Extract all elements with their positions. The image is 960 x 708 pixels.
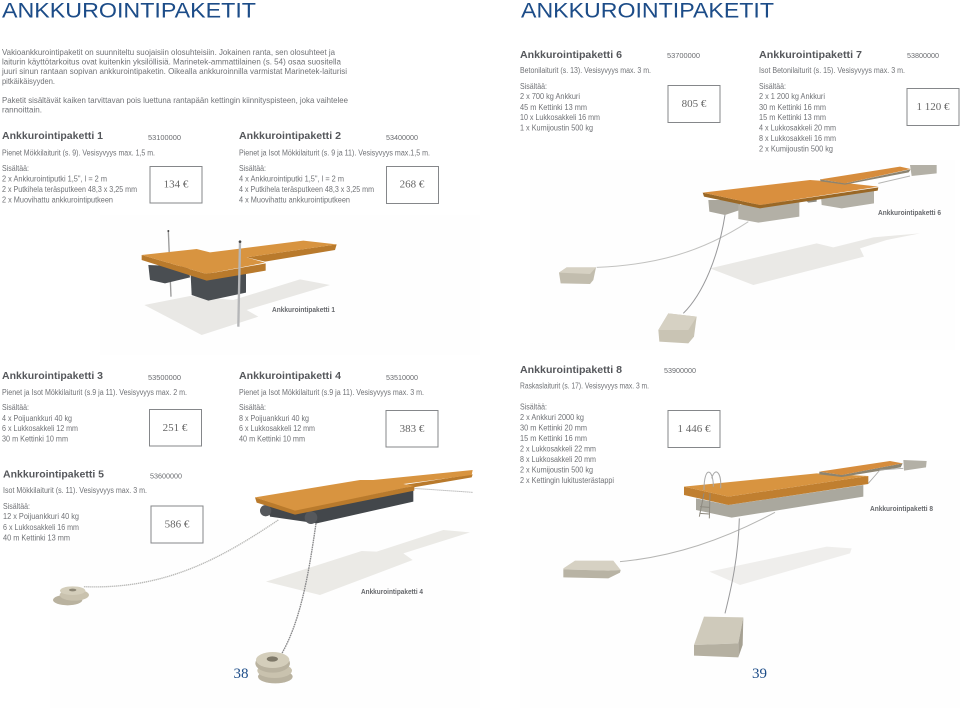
caption: package 1: Ankkurointipaketti 1: [272, 305, 335, 314]
panel: package 7: 4 x Lukkosakkeli 20 mm: [759, 124, 836, 132]
panel: package 6: Ankkurointipaketti 6: [520, 49, 622, 61]
illustration: dock package 8: [563, 460, 927, 657]
panel: package 5: 6 x Lukkosakkeli 16 mm: [3, 523, 79, 532]
panel: package 8: 2 x Kettingin lukitusterästappi: [520, 476, 614, 485]
panel: package 1: Ankkurointipaketti 1: [2, 130, 103, 142]
panel: package 3: Pienet ja Isot Mökkilaiturit (s.9 ja 11). Vesisyvyys max. 2 m.: [2, 388, 187, 397]
intro text: laiturin käyttötarkoitus ovat kuitenkin yksilöllisiä. Marinetek-ammattilainen (s. 54) osaa suositella: [2, 56, 341, 66]
panel: package 5: 40 m Kettinki 13 mm: [3, 534, 70, 542]
panel: package 1: [2, 130, 202, 204]
panel: package 1: Pienet Mökkilaiturit (s. 9). Vesisyvyys max. 1,5 m.: [2, 148, 155, 158]
illustration: dock package 4 shadow, chains and weights: [53, 520, 470, 683]
panel: package 8: 2 x Lukkosakkeli 22 mm: [520, 444, 596, 454]
price box: 805 €: [682, 98, 707, 110]
caption: package 8: Ankkurointipaketti 8: [870, 504, 933, 513]
price box: [150, 410, 202, 446]
panel: package 6: 2 x 700 kg Ankkuri: [520, 92, 580, 101]
panel: package 4: [239, 370, 438, 447]
price box: 134 €: [164, 178, 189, 190]
panel: package 6: Betonilaiturit (s. 13). Vesisyvyys max. 3 m.: [520, 66, 651, 75]
price box: [386, 166, 438, 204]
panel: package 3: 53500000: [148, 373, 181, 382]
panel: package 6: Sisältää:: [520, 82, 547, 91]
panel: package 7: 2 x Kumijoustin 500 kg: [759, 144, 833, 154]
caption: package 6: Ankkurointipaketti 6: [878, 208, 941, 217]
price box: 1 446 €: [678, 423, 711, 435]
page number 39: 39: [752, 666, 767, 682]
panel: package 5: Ankkurointipaketti 5: [3, 468, 104, 480]
panel: package 8: Raskaslaiturit (s. 17). Vesisyvyys max. 3 m.: [520, 382, 649, 390]
panel: package 4: Sisältää:: [239, 403, 266, 412]
panel: package 7: 2 x 1 200 kg Ankkuri: [759, 92, 825, 101]
panel: package 4: 53510000: [386, 373, 418, 382]
panel: package 1: Sisältää:: [2, 164, 29, 173]
panel: package 8: 15 m Kettinki 16 mm: [520, 434, 587, 443]
panel: package 7: [759, 49, 959, 154]
panel: package 3: 30 m Kettinki 10 mm: [2, 434, 68, 444]
panel: package 6: 53700000: [667, 51, 700, 60]
panel: package 8: 2 x Kumijoustin 500 kg: [520, 466, 593, 474]
panel: package 3: 6 x Lukkosakkeli 12 mm: [2, 424, 78, 433]
panel: package 4: 40 m Kettinki 10 mm: [239, 434, 305, 444]
page number 38: 38: [234, 666, 248, 682]
panel: package 8: Sisältää:: [520, 402, 547, 412]
intro text: rannoittain.: [2, 104, 42, 114]
illustration: dock package 4 deck: [255, 470, 473, 524]
price box: [668, 410, 720, 448]
panel: package 4: Pienet ja Isot Mökkilaiturit (s.9 ja 11). Vesisyvyys max. 3 m.: [239, 388, 424, 397]
panel: package 3: Ankkurointipaketti 3: [2, 370, 103, 382]
panel: package 7: 30 m Kettinki 16 mm: [759, 103, 826, 112]
panel: package 5: [3, 468, 203, 543]
panel: package 5: 12 x Poijuankkuri 40 kg: [3, 512, 79, 521]
panel: package 2: 4 x Putkihela teräsputkeen 48,3 x 3,25 mm: [239, 185, 374, 194]
price box: [151, 506, 203, 543]
panel: package 2: [239, 130, 438, 204]
panel: package 2: Pienet ja Isot Mökkilaiturit (s. 9 ja 11). Vesisyvyys max.1,5 m.: [239, 148, 430, 158]
panel: package 3: Sisältää:: [2, 403, 29, 412]
panel: package 6: 1 x Kumijoustin 500 kg: [520, 124, 593, 132]
panel: package 7: 53800000: [907, 51, 939, 60]
panel: package 7: Ankkurointipaketti 7: [759, 49, 862, 61]
panel: package 8: 8 x Lukkosakkeli 20 mm: [520, 455, 596, 464]
price box: 268 €: [400, 178, 425, 190]
panel: package 6: 10 x Lukkosakkeli 16 mm: [520, 113, 600, 122]
panel: package 8: 30 m Kettinki 20 mm: [520, 424, 587, 432]
panel: package 2: 4 x Ankkurointiputki 1,5", l = 2 m: [239, 174, 344, 184]
panel: package 3: 4 x Poijuankkuri 40 kg: [2, 414, 72, 423]
panel: package 2: Ankkurointipaketti 2: [239, 130, 341, 142]
price box: 1 120 €: [916, 101, 950, 113]
intro text: juuri sinun rantaan sopivan ankkurointipaketin. Oikealla ankkuroinnilla varmistat Marinetek-laiturisi: [1, 66, 347, 76]
panel: package 4: 6 x Lukkosakkeli 12 mm: [239, 424, 315, 433]
panel: package 7: Sisältää:: [759, 82, 786, 91]
intro text: Paketit sisältävät kaiken tarvittavan pois luettuna rantapään kettingin kiinnityspisteen, joka vaihtelee: [2, 95, 348, 105]
panel: package 7: Isot Betonilaiturit (s. 15). Vesisyvyys max. 3 m.: [759, 66, 905, 75]
price box: [386, 410, 438, 447]
intro text: Vakioankkurointipaketit on suunniteltu suojaisiin olosuhteisiin. Jokainen ranta, sen olosuhteet ja: [2, 47, 335, 57]
panel: package 6: 45 m Kettinki 13 mm: [520, 103, 587, 112]
intro text: [1, 47, 348, 114]
illustration: dock package 1: [142, 230, 337, 335]
price box: [907, 88, 959, 126]
panel: package 1: 53100000: [148, 133, 181, 142]
panel: package 6: [520, 49, 720, 132]
panel: package 4: Ankkurointipaketti 4: [239, 370, 341, 382]
panel: package 8: 53900000: [664, 366, 696, 375]
price box: 586 €: [165, 518, 190, 530]
panel: package 7: 15 m Kettinki 13 mm: [759, 113, 826, 122]
panel: package 8: [520, 364, 720, 485]
panel: package 1: 2 x Putkihela teräsputkeen 48,3 x 3,25 mm: [2, 185, 137, 194]
panel: package 7: 8 x Lukkosakkeli 16 mm: [759, 134, 836, 143]
title: right page: ANKKUROINTIPAKETIT: [521, 0, 774, 22]
panel: package 2: 4 x Muovihattu ankkurointiputkeen: [239, 196, 350, 204]
price box: [668, 86, 720, 122]
panel: package 1: 2 x Muovihattu ankkurointiputkeen: [2, 196, 113, 204]
panel: package 8: 2 x Ankkuri 2000 kg: [520, 413, 584, 422]
panel: package 1: 2 x Ankkurointiputki 1,5", l = 2 m: [2, 174, 107, 184]
price box: 383 €: [400, 423, 425, 435]
panel: package 5: Sisältää:: [3, 502, 30, 511]
price box: 251 €: [163, 422, 188, 434]
panel: package 2: Sisältää:: [239, 164, 266, 173]
panel: package 4: 8 x Poijuankkuri 40 kg: [239, 414, 309, 423]
panel: package 2: 53400000: [386, 133, 418, 142]
illustration: dock package 6: [559, 165, 937, 343]
panel: package 8: Ankkurointipaketti 8: [520, 364, 622, 376]
price box: [150, 166, 202, 203]
panel: package 3: [2, 370, 202, 446]
panel: package 5: Isot Mökkilaiturit (s. 11). Vesisyvyys max. 3 m.: [3, 486, 147, 495]
title: left page: ANKKUROINTIPAKETIT: [2, 0, 256, 22]
caption: package 4: Ankkurointipaketti 4: [361, 587, 424, 596]
panel: package 5: 53600000: [150, 472, 182, 480]
intro text: pitkäikäisyyden.: [2, 76, 55, 86]
